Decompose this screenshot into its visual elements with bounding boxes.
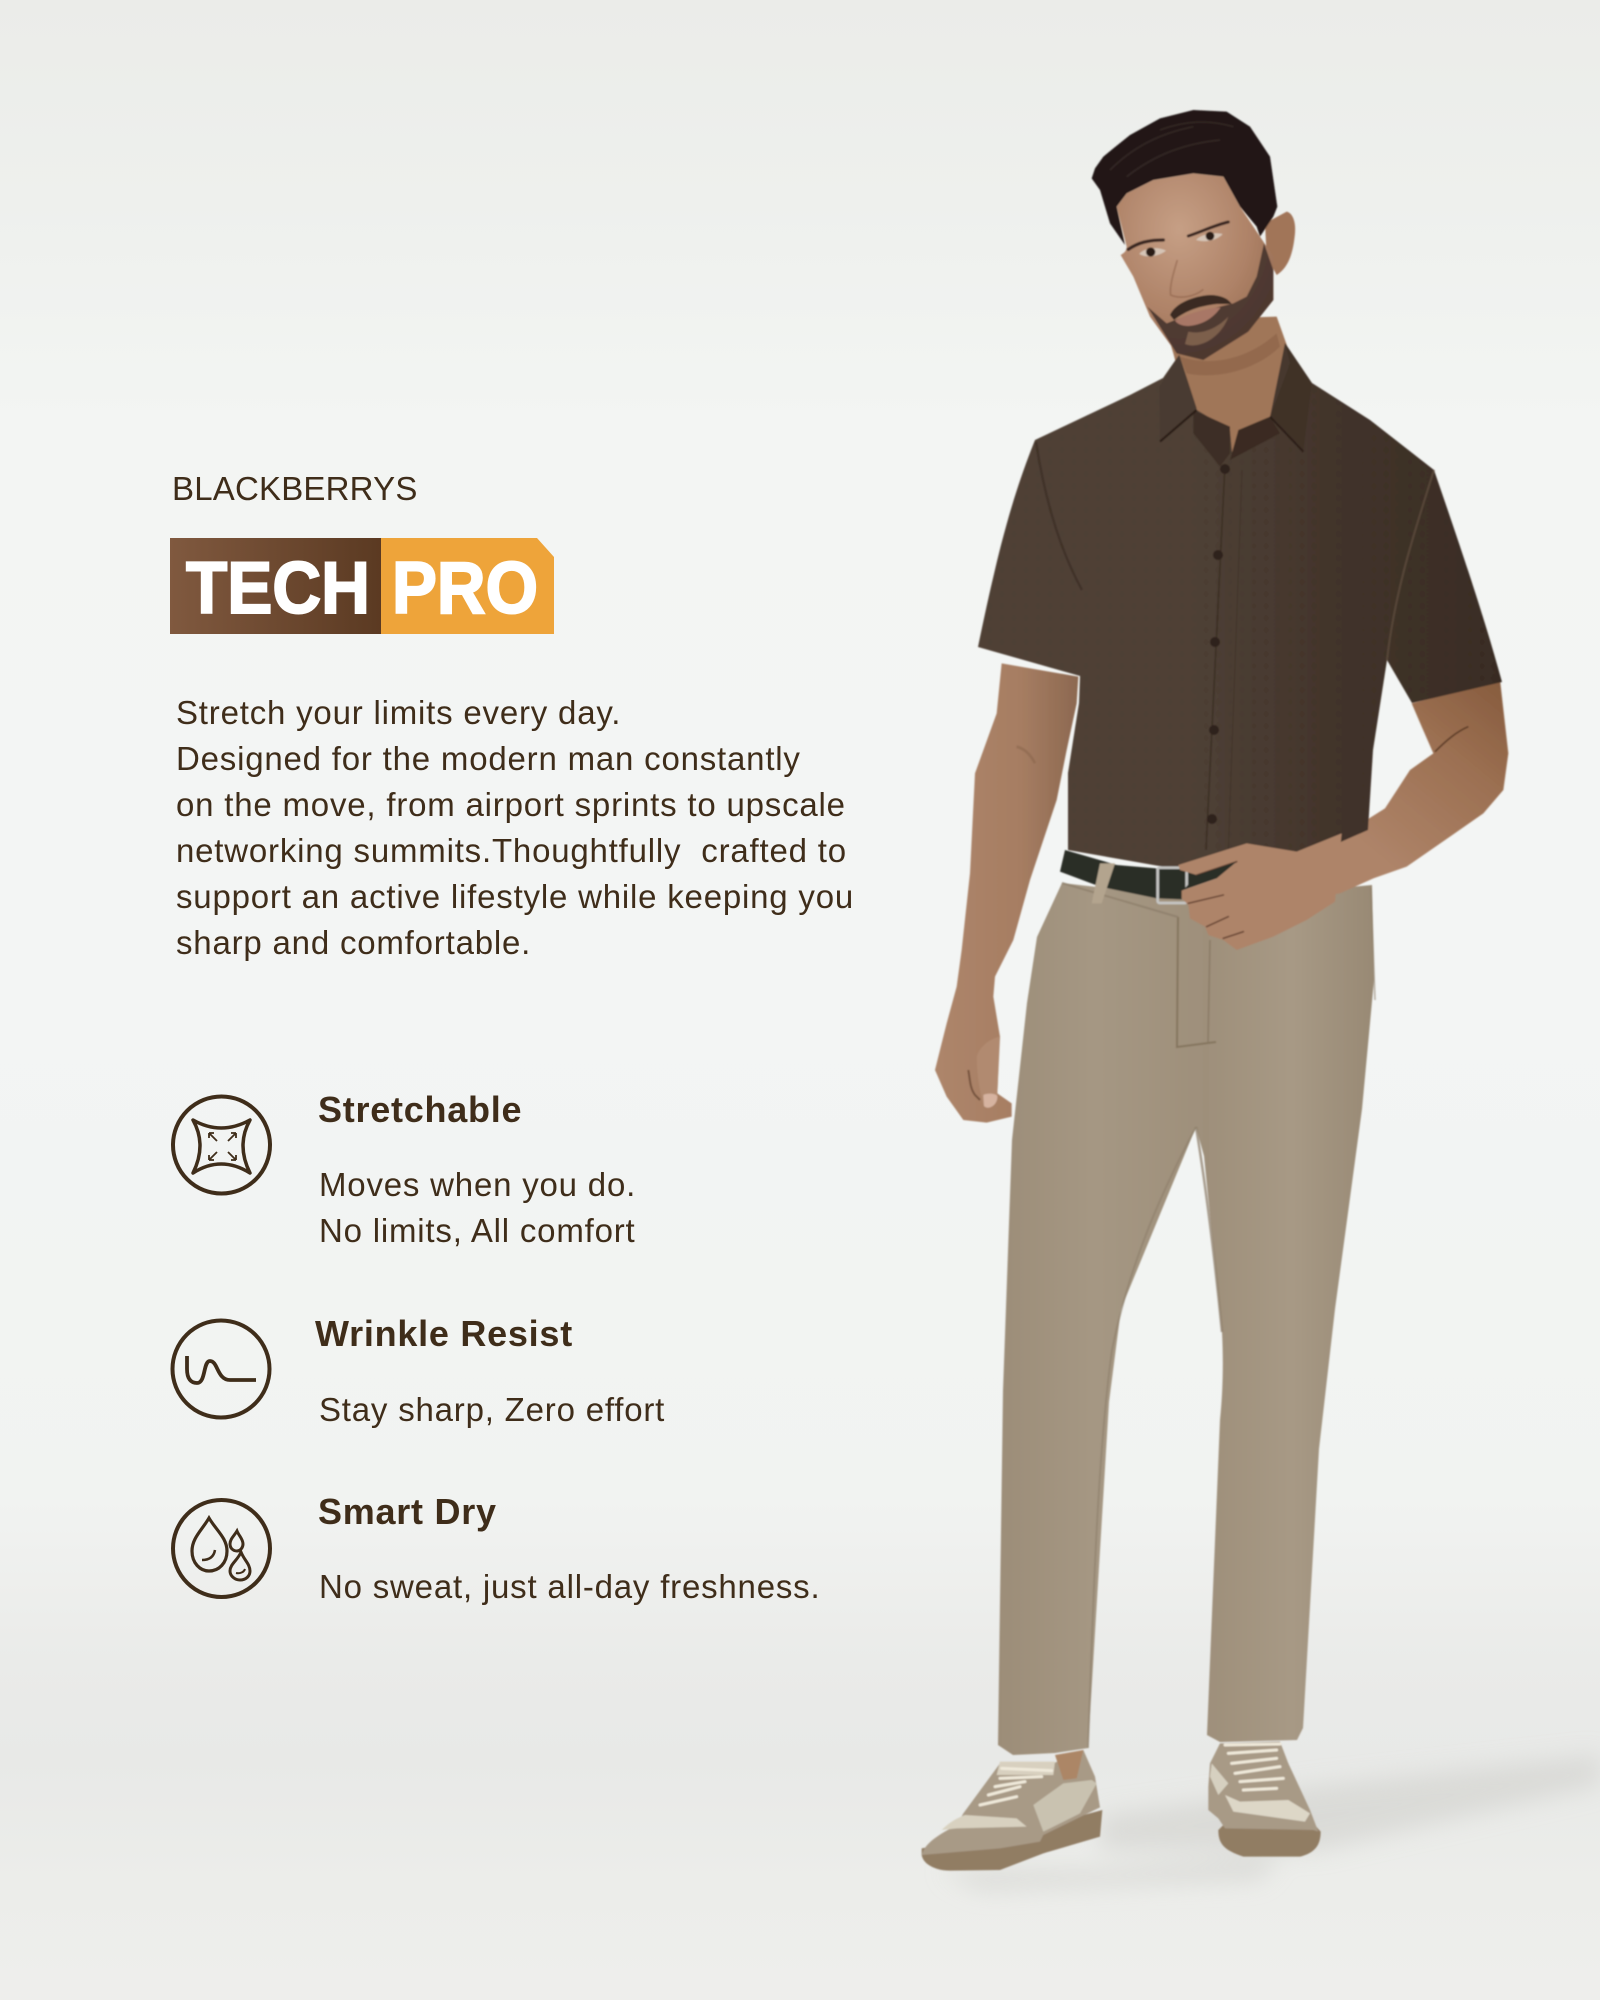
description paragraph: Designed for the modern man constantly — [176, 740, 801, 777]
hair — [1092, 110, 1277, 245]
description paragraph: sharp and comfortable. — [176, 924, 531, 961]
description paragraph: on the move, from airport sprints to upscale — [176, 786, 846, 823]
shirt — [978, 343, 1502, 882]
ear — [1265, 212, 1295, 275]
trousers — [998, 883, 1375, 1755]
right arm — [1293, 680, 1508, 900]
icon: wrinkle resist wave — [170, 1318, 272, 1420]
left arm and hand — [935, 663, 1078, 1123]
description paragraph: support an active lifestyle while keeping you — [176, 878, 854, 915]
face — [1117, 173, 1273, 360]
brand name: BLACKBERRYS — [172, 470, 418, 507]
description paragraph: Stretch your limits every day. — [176, 694, 621, 731]
description paragraph — [176, 694, 854, 961]
floor shadow under shoes — [940, 1755, 1600, 1890]
left shoe — [922, 1750, 1102, 1871]
description paragraph: networking summits.Thoughtfully crafted to — [176, 832, 847, 869]
feature heading: Stretchable: Stretchable — [318, 1089, 522, 1130]
feature text: Wrinkle Resist: Stay sharp, Zero effort — [319, 1391, 665, 1428]
shirt buttons — [1207, 464, 1230, 824]
icon: stretchable fabric — [171, 1094, 272, 1196]
feature text: Stretchable — [319, 1166, 636, 1249]
feature text: Stretchable: No limits, All comfort — [319, 1212, 636, 1249]
collar — [1159, 343, 1312, 467]
feature heading: Smart Dry: Smart Dry — [318, 1491, 497, 1532]
right shoe — [1208, 1742, 1321, 1857]
belt with buckle — [1060, 850, 1220, 903]
logo: TECH PRO badge: PRO — [392, 548, 538, 629]
feature text: Smart Dry: No sweat, just all-day freshness. — [319, 1568, 820, 1605]
feature heading: Wrinkle Resist: Wrinkle Resist — [315, 1313, 573, 1354]
icon: smart dry droplets — [171, 1498, 272, 1599]
logo: TECH PRO badge — [170, 538, 554, 634]
feature text: Stretchable: Moves when you do. — [319, 1166, 636, 1203]
neck — [1163, 317, 1293, 457]
right hand on belt — [1178, 833, 1342, 950]
logo: TECH PRO badge: TECH — [186, 548, 370, 629]
